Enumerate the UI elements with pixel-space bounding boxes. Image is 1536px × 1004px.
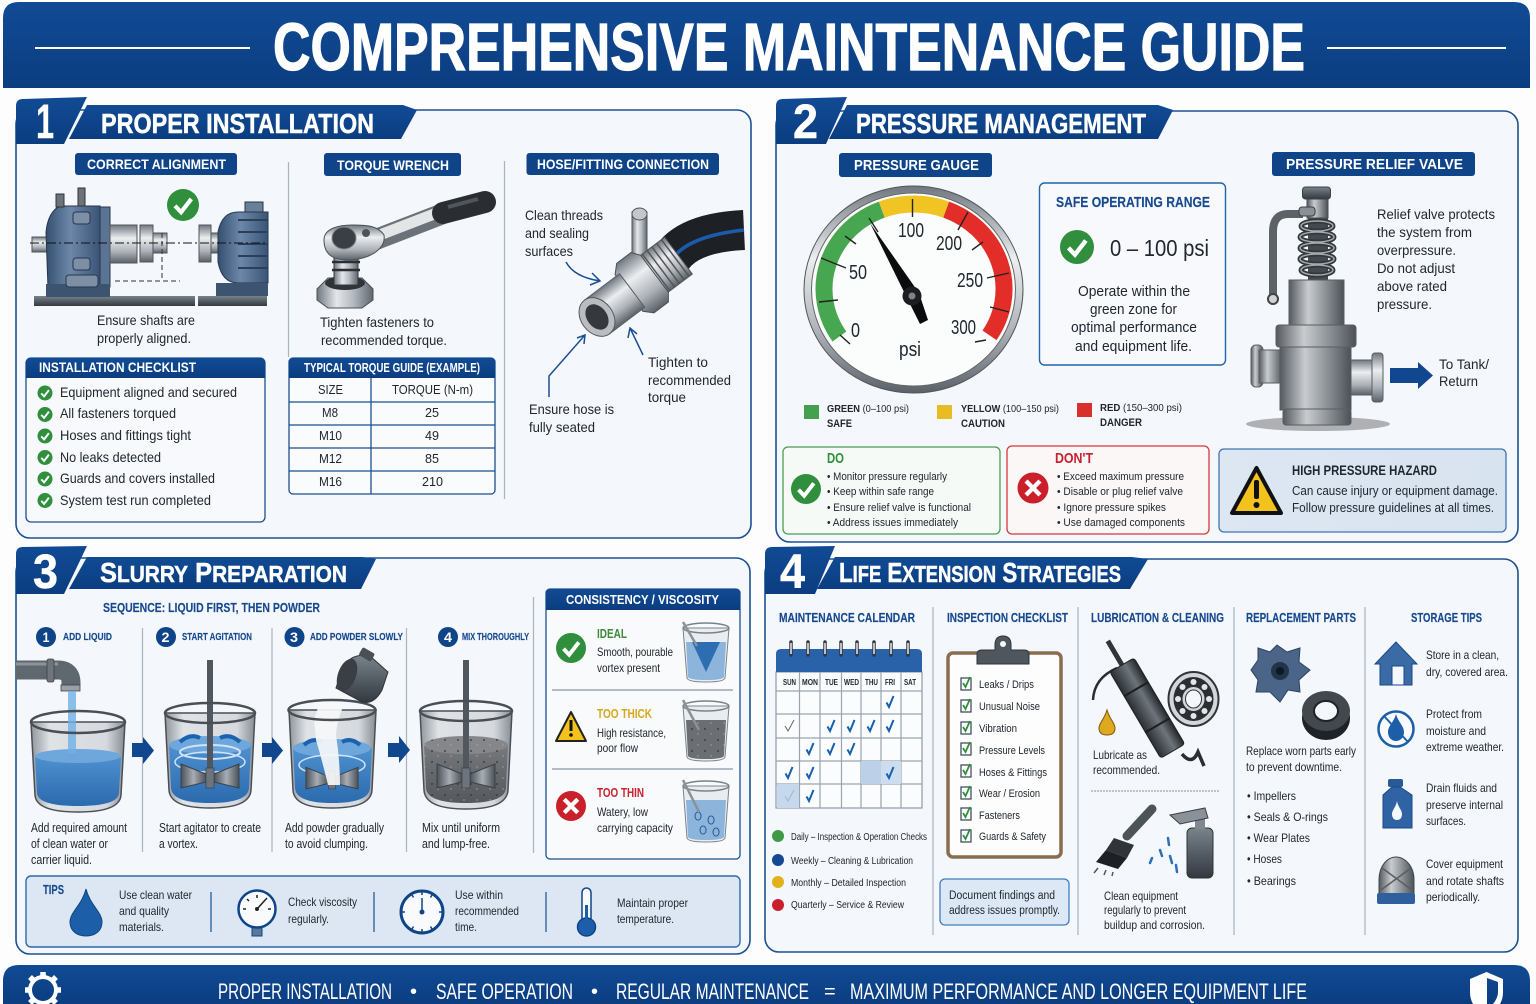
icon: water drop — [70, 889, 102, 936]
hazard box — [1219, 449, 1506, 532]
caption: to prevent downtime. — [1246, 760, 1342, 774]
step 3: add powder: ADD POWDER SLOWLY — [310, 631, 403, 643]
icon: spray bottle — [1150, 808, 1213, 878]
row: too thin: Watery, low — [597, 805, 648, 819]
gauge — [804, 186, 1023, 393]
caption — [31, 821, 127, 867]
arrow: to hose end — [549, 335, 585, 397]
installation checklist: All fasteners torqued — [60, 405, 176, 421]
caption: to avoid clumping. — [285, 837, 368, 851]
tip: store — [1426, 648, 1508, 679]
caption: carrier liquid. — [31, 853, 92, 867]
caption — [1104, 889, 1205, 932]
footer message: = — [824, 981, 836, 1003]
icon: brush — [1094, 809, 1152, 876]
caption: alignment: properly aligned. — [97, 330, 191, 346]
column: lubrication and cleaning: LUBRICATION & CLEANING — [1091, 611, 1224, 625]
callout: relief valve text: Do not adjust — [1377, 260, 1455, 276]
parts list — [1247, 789, 1328, 888]
callout: tighten: Tighten to — [648, 354, 708, 370]
safe operating range box — [1040, 183, 1226, 365]
caption — [1246, 744, 1356, 774]
section 3 header tab — [16, 546, 376, 599]
arrow 2 — [262, 737, 283, 764]
callout: clean threads — [525, 207, 603, 259]
tip 2 text: regularly. — [288, 912, 329, 926]
parts list: • Hoses — [1247, 852, 1282, 866]
title banner — [3, 2, 1530, 88]
calendar: MON — [802, 678, 818, 687]
dont box: DON'T — [1055, 450, 1093, 467]
gauge legend: GREEN (0–100 psi) — [827, 403, 909, 415]
callout: tighten: recommended — [648, 372, 731, 388]
row: ideal: IDEAL — [597, 626, 627, 641]
footer message: PROPER INSTALLATION — [218, 979, 392, 1004]
label: to tank return — [1439, 356, 1489, 389]
torque table: M10 — [319, 428, 342, 443]
icon: covered equipment — [1377, 857, 1415, 904]
installation checklist: System test run completed — [60, 492, 211, 508]
caption: regularly to prevent — [1104, 903, 1187, 917]
tip 4 text — [617, 896, 688, 926]
label: pressure gauge: PRESSURE GAUGE — [854, 157, 979, 174]
caption — [1093, 748, 1160, 777]
gauge: 50 — [849, 262, 867, 284]
callout: relief valve text: above rated — [1377, 278, 1447, 294]
hazard box: Can cause injury or equipment damage. — [1292, 483, 1498, 498]
caption: buildup and corrosion. — [1104, 918, 1205, 932]
clipboard: Unusual Noise — [979, 701, 1040, 713]
icon: seal ring — [1302, 691, 1350, 740]
calendar legend: Weekly – Cleaning & Lubrication — [791, 856, 913, 867]
step 2: start agitation: 2 — [162, 629, 170, 645]
consistency panel — [546, 589, 740, 859]
label: correct alignment: CORRECT ALIGNMENT — [87, 156, 226, 172]
gauge: 0 — [851, 320, 860, 342]
dont box — [1007, 446, 1209, 534]
tip: drain — [1426, 781, 1503, 828]
tip 1 text: Use clean water — [119, 888, 192, 902]
footer message: REGULAR MAINTENANCE — [616, 979, 809, 1004]
callout: clean threads: surfaces — [525, 243, 573, 259]
caption: Add required amount — [31, 821, 127, 835]
tip 2 text — [288, 895, 357, 926]
safe operating range box: optimal performance — [1071, 319, 1197, 336]
callout: hose seated: fully seated — [529, 419, 595, 435]
row: too thin: TOO THIN — [597, 785, 644, 800]
torque table: 49 — [425, 428, 439, 443]
torque table: TYPICAL TORQUE GUIDE (EXAMPLE) — [304, 361, 480, 375]
gauge legend: RED (150–300 psi) — [1100, 402, 1182, 414]
tip 2 text: Check viscosity — [288, 895, 357, 909]
illustration: pump and motor alignment — [30, 188, 268, 306]
footer banner — [3, 965, 1530, 1004]
parts list: • Impellers — [1247, 789, 1296, 803]
row: too thick: TOO THICK — [597, 706, 652, 721]
tip 3 text: Use within — [455, 888, 503, 902]
label: to tank return: Return — [1439, 373, 1478, 389]
caption: Mix until uniform — [422, 821, 500, 835]
section 3 header tab: 3 — [33, 546, 58, 599]
illustration: torque wrench — [317, 199, 485, 308]
section 4 header tab: 4 — [780, 546, 805, 599]
calendar: WED — [844, 678, 859, 687]
calendar: TUE — [825, 678, 839, 687]
column: storage tips — [1375, 611, 1508, 904]
row: too thick: poor flow — [597, 741, 638, 755]
section 1 header tab: PROPER INSTALLATION — [101, 108, 374, 139]
hazard box: HIGH PRESSURE HAZARD — [1292, 462, 1437, 478]
icon: bearing — [1168, 672, 1218, 726]
caption: a vortex. — [159, 837, 198, 851]
calendar: SAT — [904, 678, 916, 687]
panel 1: proper installation — [16, 96, 751, 538]
gauge: psi — [899, 339, 921, 361]
calendar: THU — [865, 678, 878, 687]
label: torque wrench: TORQUE WRENCH — [337, 157, 449, 173]
note box: Document findings and — [949, 890, 1055, 902]
column: storage tips: STORAGE TIPS — [1411, 611, 1482, 625]
caption: of clean water or — [31, 837, 108, 851]
installation checklist: Guards and covers installed — [60, 470, 215, 486]
dont box: • Exceed maximum pressure — [1057, 471, 1184, 483]
tips bar: TIPS — [43, 883, 64, 897]
tip: protect: Protect from — [1426, 707, 1482, 721]
tip: store: dry, covered area. — [1426, 665, 1508, 679]
step 4: mix — [420, 627, 529, 851]
label: relief valve — [1272, 152, 1475, 176]
dont box: • Disable or plug relief valve — [1057, 486, 1183, 498]
step 2: start agitation: START AGITATION — [182, 631, 252, 643]
sequence heading: SEQUENCE: LIQUID FIRST, THEN POWDER — [103, 600, 320, 615]
beaker with slurry — [420, 660, 512, 809]
safe operating range box: Operate within the — [1078, 283, 1190, 300]
dont box: • Use damaged components — [1057, 517, 1185, 529]
tip: cover: periodically. — [1426, 890, 1480, 904]
icon: gauge — [238, 890, 276, 936]
installation checklist — [26, 358, 265, 522]
tip 1 text — [119, 888, 192, 934]
label: relief valve: PRESSURE RELIEF VALVE — [1286, 156, 1463, 173]
panel 3: slurry preparation — [16, 546, 750, 954]
caption: Replace worn parts early — [1246, 744, 1356, 758]
label: hose fitting: HOSE/FITTING CONNECTION — [537, 156, 709, 172]
calendar legend: Daily – Inspection & Operation Checks — [791, 832, 927, 843]
clipboard — [948, 636, 1061, 857]
torque table: TORQUE (N-m) — [392, 382, 473, 397]
caption: Lubricate as — [1093, 748, 1147, 762]
gauge: 250 — [957, 270, 983, 292]
icon: grease gun — [1093, 634, 1204, 766]
tips bar — [26, 876, 740, 947]
footer message — [218, 979, 1307, 1004]
gauge legend — [804, 402, 1182, 430]
tip: drain: preserve internal — [1426, 798, 1503, 812]
note box — [940, 879, 1069, 925]
calendar legend — [772, 830, 927, 911]
tip 3 text: time. — [455, 920, 477, 934]
tip 1 text: and quality — [119, 904, 169, 918]
caption: alignment — [97, 312, 195, 346]
section 2 header tab — [776, 96, 1173, 149]
callout: hose seated — [529, 401, 614, 435]
icon: shield — [1470, 972, 1503, 1004]
safe operating range box: 0 – 100 psi — [1110, 235, 1209, 261]
step 4: mix: MIX THOROUGHLY — [462, 631, 529, 643]
torque table: SIZE — [318, 382, 343, 397]
tip: store: Store in a clean, — [1426, 648, 1499, 662]
callout: relief valve text — [1377, 206, 1495, 312]
arrow 3 — [388, 736, 410, 763]
arrow: to nut — [628, 328, 643, 355]
clipboard: Hoses & Fittings — [979, 767, 1047, 779]
label: torque wrench — [324, 153, 461, 176]
column: replacement parts — [1246, 611, 1356, 888]
caption: torque: Tighten fasteners to — [320, 314, 434, 330]
do box — [783, 447, 1000, 534]
section 4 header tab: LIFE EXTENSION STRATEGIES — [839, 557, 1121, 588]
section 1 header tab — [16, 96, 417, 149]
icon: warning — [1232, 468, 1281, 513]
do box: DO — [827, 450, 844, 467]
clipboard: Fasteners — [979, 810, 1020, 822]
tip 4 text: Maintain proper — [617, 896, 688, 910]
gauge legend: CAUTION — [961, 418, 1005, 430]
beaker with powder — [288, 672, 376, 808]
calendar: SUN — [783, 678, 796, 687]
do box: • Address issues immediately — [827, 517, 958, 529]
caption: torque: recommended torque. — [321, 332, 447, 348]
footer message: MAXIMUM PERFORMANCE AND LONGER EQUIPMENT LIFE — [850, 979, 1307, 1004]
section 3 header tab: SLURRY PREPARATION — [100, 557, 347, 588]
tip 3 text — [455, 888, 519, 934]
torque table: M16 — [319, 474, 342, 489]
callout: relief valve text: overpressure. — [1377, 242, 1456, 258]
illustration: hose fitting — [566, 208, 744, 351]
illustration: relief valve — [1246, 187, 1390, 431]
do box: • Keep within safe range — [827, 486, 934, 498]
torque table: M12 — [319, 451, 342, 466]
row: too thick: High resistance, — [597, 726, 666, 740]
tip: protect: moisture and — [1426, 724, 1486, 738]
row: ideal: vortex present — [597, 661, 661, 675]
tip 1 text: materials. — [119, 920, 164, 934]
do box: • Monitor pressure regularly — [827, 471, 947, 483]
column: maintenance calendar — [772, 611, 927, 911]
callout: relief valve text: pressure. — [1377, 296, 1432, 312]
step 2: start agitation — [156, 627, 261, 851]
icon: impeller — [1251, 645, 1310, 702]
gauge: 200 — [936, 233, 962, 255]
caption — [159, 821, 261, 851]
caption — [422, 821, 500, 851]
installation checklist: Hoses and fittings tight — [60, 427, 191, 443]
row: too thick — [556, 700, 729, 761]
label: hose fitting — [526, 153, 719, 175]
step 4: mix: 4 — [444, 629, 452, 645]
footer message: • — [591, 981, 598, 1003]
torque table: M8 — [322, 405, 338, 420]
gauge legend: SAFE — [827, 418, 852, 430]
pipe — [16, 659, 80, 691]
caption: alignment: Ensure shafts are — [97, 312, 195, 328]
torque table — [289, 358, 495, 494]
tip: cover — [1426, 857, 1504, 904]
column: lubrication and cleaning — [1091, 611, 1224, 932]
callout: tighten — [648, 354, 731, 405]
tip: protect: extreme weather. — [1426, 740, 1504, 754]
column: replacement parts: REPLACEMENT PARTS — [1246, 611, 1356, 625]
safe operating range box: and equipment life. — [1075, 338, 1192, 355]
torque table: 25 — [425, 405, 439, 420]
dont box: • Ignore pressure spikes — [1057, 502, 1166, 514]
footer message: SAFE OPERATION — [436, 979, 573, 1004]
section 4 header tab — [765, 546, 1148, 599]
clipboard: Wear / Erosion — [979, 788, 1040, 800]
torque table: 210 — [422, 474, 443, 489]
callout: clean threads: and sealing — [525, 225, 589, 241]
calendar legend: Monthly – Detailed Inspection — [791, 878, 906, 889]
icon: fluid bottle — [1383, 779, 1412, 828]
consistency panel: CONSISTENCY / VISCOSITY — [566, 592, 719, 607]
label: to tank return: To Tank/ — [1439, 356, 1489, 372]
beaker with water — [31, 691, 125, 812]
caption: Start agitator to create — [159, 821, 261, 835]
section 1 header tab: 1 — [36, 96, 54, 149]
callout: clean threads: Clean threads — [525, 207, 603, 223]
panel 4: life extension strategies — [765, 546, 1518, 952]
icon: oil drop — [1099, 710, 1115, 735]
clipboard: Guards & Safety — [979, 831, 1046, 843]
caption: torque — [320, 314, 447, 348]
row: too thin: carrying capacity — [597, 821, 673, 835]
step 3: add powder — [284, 627, 403, 851]
calendar: FRI — [885, 678, 895, 687]
gauge legend: DANGER — [1100, 417, 1142, 429]
icon: house — [1375, 642, 1417, 685]
icon: gear — [25, 972, 61, 1004]
step 1: add liquid: 1 — [42, 629, 50, 645]
column: inspection checklist: INSPECTION CHECKLIST — [947, 611, 1068, 625]
step 3: add powder: 3 — [290, 629, 298, 645]
installation checklist: No leaks detected — [60, 449, 161, 465]
icon: clock — [401, 891, 443, 933]
torque table: 85 — [425, 451, 439, 466]
caption: Clean equipment — [1104, 889, 1179, 903]
callout: hose seated: Ensure hose is — [529, 401, 614, 417]
tip: cover: Cover equipment — [1426, 857, 1504, 871]
beaker agitating — [165, 660, 255, 808]
icon: no moisture — [1378, 712, 1414, 746]
label: correct alignment — [75, 153, 237, 175]
arrow: to threads — [566, 262, 600, 285]
row: ideal — [556, 622, 729, 682]
installation checklist: INSTALLATION CHECKLIST — [39, 359, 196, 375]
step 1: add liquid — [16, 627, 127, 867]
tip: drain: Drain fluids and — [1426, 781, 1497, 795]
section 2 header tab: 2 — [793, 96, 818, 149]
caption — [285, 821, 385, 851]
column: maintenance calendar: MAINTENANCE CALENDAR — [779, 611, 915, 625]
tip: protect — [1426, 707, 1504, 754]
row: ideal: Smooth, pourable — [597, 645, 673, 659]
calendar — [776, 642, 922, 808]
callout: relief valve text: the system from — [1377, 224, 1472, 240]
callout: tighten: torque — [648, 389, 686, 405]
gauge: 300 — [951, 317, 976, 339]
caption: Add powder gradually — [285, 821, 385, 835]
note box: address issues promptly. — [949, 905, 1060, 917]
label: pressure gauge — [839, 153, 992, 177]
section 2 header tab: PRESSURE MANAGEMENT — [856, 108, 1146, 139]
caption: recommended. — [1093, 763, 1160, 777]
installation checklist: Equipment aligned and secured — [60, 384, 237, 400]
tip 4 text: temperature. — [617, 912, 674, 926]
gauge: 100 — [898, 220, 924, 242]
footer message: • — [410, 981, 417, 1003]
calendar legend: Quarterly – Service & Review — [791, 900, 905, 911]
icon: thermometer — [578, 888, 596, 936]
tip 3 text: recommended — [455, 904, 519, 918]
arrow 1 — [132, 737, 154, 764]
parts list: • Wear Plates — [1247, 831, 1310, 845]
tip: drain: surfaces. — [1426, 814, 1466, 828]
parts list: • Bearings — [1247, 874, 1296, 888]
caption: and lump-free. — [422, 837, 490, 851]
clipboard: Leaks / Drips — [979, 679, 1034, 691]
arrow: to tank — [1390, 362, 1433, 389]
safe operating range box: green zone for — [1090, 301, 1177, 318]
icon: pouring cup — [333, 647, 388, 702]
row: too thin — [556, 780, 729, 842]
safe operating range box: SAFE OPERATING RANGE — [1056, 194, 1210, 211]
parts list: • Seals & O-rings — [1247, 810, 1328, 824]
clipboard: Vibration — [979, 723, 1017, 735]
tip: cover: and rotate shafts — [1426, 874, 1504, 888]
panel 2: pressure management — [776, 96, 1518, 542]
step 1: add liquid: ADD LIQUID — [63, 631, 112, 643]
hazard box: Follow pressure guidelines at all times. — [1292, 500, 1494, 515]
callout: relief valve text: Relief valve protects — [1377, 206, 1495, 222]
clipboard: Pressure Levels — [979, 745, 1045, 757]
icon: alignment ok — [167, 189, 199, 221]
gauge legend: YELLOW (100–150 psi) — [961, 403, 1059, 415]
do box: • Ensure relief valve is functional — [827, 502, 971, 514]
column: inspection checklist — [940, 611, 1069, 925]
